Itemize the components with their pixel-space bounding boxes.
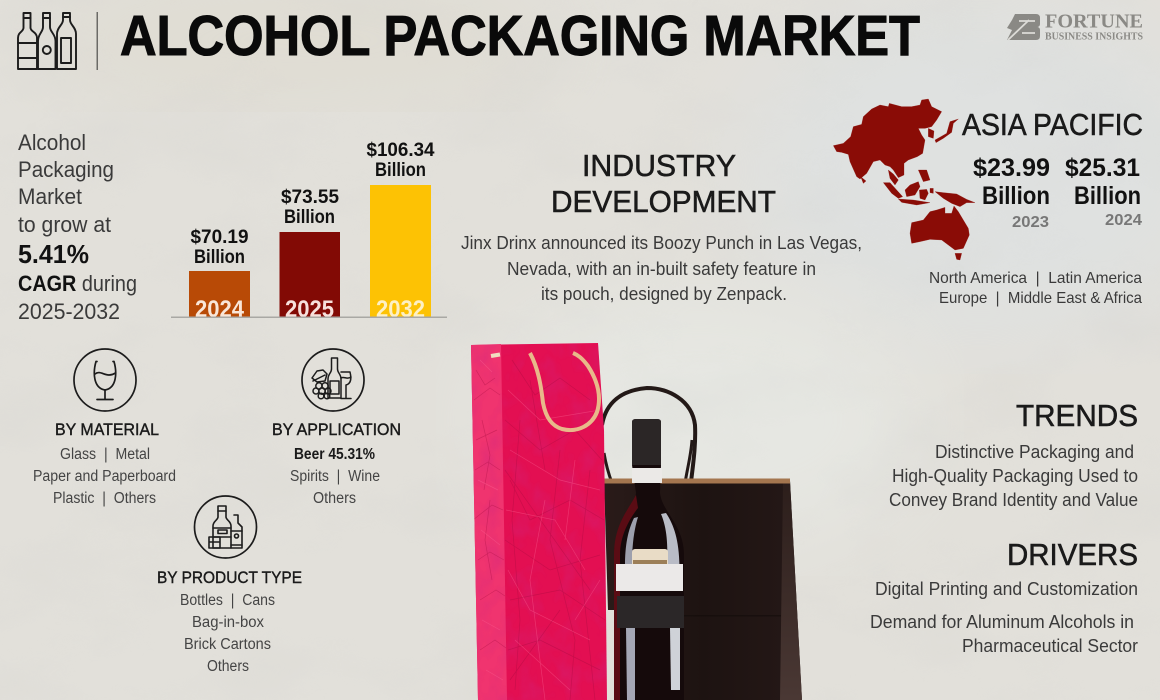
Asia Pacific value 2023: 2023: [1012, 214, 1049, 231]
industry development text: its pouch, designed by Zenpack.: [541, 284, 787, 304]
segment: by material: BY MATERIAL: [55, 420, 159, 439]
bar 2024: [189, 226, 250, 323]
drivers: Digital Printing and Customization: [875, 579, 1138, 599]
segment: by product type: [157, 568, 302, 675]
CAGR text block: 5.41%: [18, 239, 89, 269]
Asia Pacific value 2023: [973, 154, 1050, 231]
trends: TRENDS: [1016, 398, 1138, 433]
industry development text: [461, 233, 862, 304]
heading: industry development: INDUSTRY: [582, 148, 736, 183]
bar 2032: [366, 139, 435, 323]
CAGR text block: CAGR during: [18, 271, 137, 296]
crease lines: [473, 370, 506, 650]
icon: wine glass: [74, 349, 136, 411]
segment: by product type: Bag-in-box: [192, 614, 264, 631]
CAGR text block: Alcohol: [18, 130, 86, 155]
bar 2032: $106.34: [366, 139, 435, 161]
trends: Distinctive Packaging and: [935, 442, 1134, 462]
bar 2025: Billion: [284, 206, 335, 228]
CAGR text block: [18, 130, 137, 324]
segment: by application: Others: [313, 490, 356, 507]
wine bottle: [614, 419, 684, 700]
Asia Pacific heading: ASIA PACIFIC: [962, 107, 1143, 142]
logo: Fortune Business Insights: FORTUNE: [1045, 10, 1143, 32]
segment: by product type: Others: [207, 658, 249, 675]
drivers: DRIVERS: [1007, 537, 1138, 572]
heading: industry development: DEVELOPMENT: [551, 184, 776, 219]
bar 2024: $70.19: [190, 226, 249, 248]
bar 2024: 2024: [195, 296, 245, 323]
CAGR text block: 2025-2032: [18, 299, 120, 324]
icon: three bottles: [18, 13, 76, 69]
trends: Convey Brand Identity and Value: [889, 490, 1138, 510]
other regions: [929, 270, 1142, 307]
CAGR text block: Packaging: [18, 157, 114, 182]
trends: High-Quality Packaging Used to: [892, 466, 1138, 486]
photo: gift bags and wine bottle: [465, 340, 802, 700]
industry development text: Jinx Drinx announced its Boozy Punch in Las Vegas,: [461, 233, 862, 253]
Asia Pacific value 2023: Billion: [982, 182, 1050, 210]
other regions: North America | Latin America: [929, 270, 1142, 287]
bar 2025: [280, 186, 340, 323]
logo: Fortune Business Insights: BUSINESS INSIGHTS: [1045, 32, 1143, 42]
header divider: [96, 12, 98, 70]
bar chart: [171, 139, 447, 323]
segment: by material: Plastic | Others: [53, 490, 156, 507]
CAGR text block: to grow at: [18, 212, 111, 237]
industry development text: Nevada, with an in-built safety feature in: [507, 259, 816, 279]
pink bag: [465, 340, 610, 700]
bar 2025: $73.55: [281, 186, 339, 208]
heading: industry development: [551, 148, 776, 219]
segment: by application: [272, 420, 401, 507]
other regions: Europe | Middle East & Africa: [939, 290, 1142, 307]
Asia Pacific value 2024: $25.31: [1065, 154, 1140, 182]
logo: Fortune Business Insights: [1007, 10, 1143, 42]
drivers: [870, 537, 1138, 656]
segment: by material: Paper and Paperboard: [33, 468, 176, 485]
Asia Pacific value 2024: [1065, 154, 1142, 229]
segment: by product type: Brick Cartons: [184, 636, 271, 653]
logo mark: [1007, 14, 1040, 40]
icon: bottle, glass and grapes: [302, 349, 364, 411]
bar 2024: Billion: [194, 246, 245, 268]
segment: by product type: BY PRODUCT TYPE: [157, 568, 302, 587]
segment: by application: Beer 45.31%: [294, 446, 375, 463]
Asia Pacific value 2024: Billion: [1074, 182, 1141, 210]
title: ALCOHOL PACKAGING MARKET: [120, 4, 920, 68]
trends: [889, 398, 1138, 510]
segment: by product type: Bottles | Cans: [180, 592, 275, 609]
segment: by material: Glass | Metal: [60, 446, 150, 463]
bar 2032: 2032: [376, 296, 425, 323]
segment: by material: [33, 420, 176, 507]
bar 2032: Billion: [375, 159, 426, 181]
icon: bottles and tumbler: [194, 496, 256, 558]
map: Asia Pacific: [833, 99, 975, 260]
Asia Pacific value 2024: 2024: [1105, 212, 1142, 229]
drivers: Demand for Aluminum Alcohols in: [870, 612, 1134, 632]
CAGR text block: Market: [18, 184, 82, 209]
segment: by application: BY APPLICATION: [272, 420, 401, 439]
drivers: Pharmaceutical Sector: [962, 636, 1138, 656]
bar 2025: 2025: [285, 296, 334, 323]
Asia Pacific value 2023: $23.99: [973, 154, 1050, 182]
black bag: [602, 388, 802, 700]
segment: by application: Spirits | Wine: [290, 468, 380, 485]
rope handle: [530, 353, 599, 430]
